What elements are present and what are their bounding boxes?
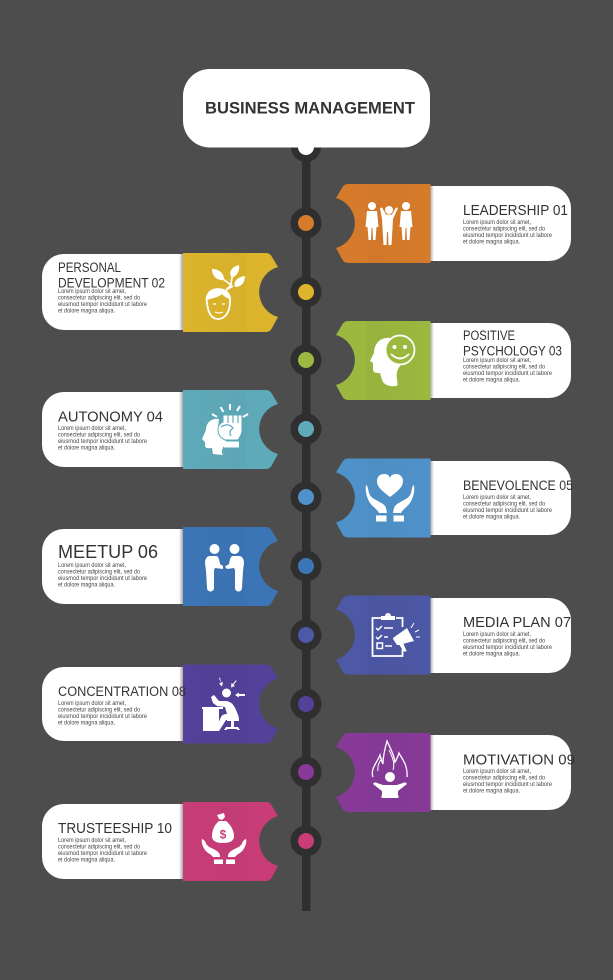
text block: Lorem ipsum dolor sit amet, (463, 768, 531, 775)
text block (58, 837, 147, 864)
text block: eiusmod tempor incididunt ut labore (463, 507, 552, 514)
text block: et dolore magna aliqua. (58, 582, 115, 588)
text block: Lorem ipsum dolor sit amet, (58, 288, 126, 295)
heading: LEADERSHIP 01 (463, 203, 568, 219)
text block: consectetur adipiscing elit, sed do (58, 294, 140, 302)
heading: AUTONOMY 04 (58, 410, 163, 426)
text block: consectetur adipiscing elit, sed do (463, 774, 545, 782)
text block: eiusmod tempor incididunt ut labore (58, 301, 147, 308)
panel: positive psychology 03 (336, 321, 571, 400)
panel: autonomy 04 (42, 390, 278, 469)
heading: PSYCHOLOGY 03 (463, 344, 562, 358)
timeline node 09 (290, 756, 322, 788)
text block (463, 219, 552, 246)
icon: money bag in hands (202, 813, 246, 864)
text block: et dolore magna aliqua. (463, 650, 520, 658)
text block (58, 562, 147, 588)
text block: consectetur adipiscing elit, sed do (463, 364, 545, 370)
text block: eiusmod tempor incididunt ut labore (463, 781, 552, 788)
timeline node 01 (290, 208, 322, 238)
icon: two people shaking hands (205, 544, 244, 592)
text block: et dolore magna aliqua. (58, 720, 115, 726)
timeline node 03 (290, 344, 322, 376)
text block: Lorem ipsum dolor sit amet, (463, 631, 531, 638)
text block (58, 425, 147, 452)
panel: benevolence 05 (336, 458, 573, 538)
header box (183, 69, 430, 155)
heading (463, 328, 562, 358)
text block (463, 494, 552, 520)
heading: BENEVOLENCE 05 (463, 478, 573, 493)
timeline node 08 (290, 688, 322, 720)
icon: head with smiley (370, 336, 414, 386)
timeline node 02 (290, 276, 322, 308)
panel: concentration 08 (42, 664, 278, 744)
text block: eiusmod tempor incididunt ut labore (463, 644, 552, 651)
heading: MOTIVATION 09 (463, 752, 575, 768)
heading: MEDIA PLAN 07 (463, 615, 571, 631)
text block: consectetur adipiscing elit, sed do (463, 638, 545, 644)
text block: et dolore magna aliqua. (463, 788, 520, 794)
text block: Lorem ipsum dolor sit amet, (463, 494, 531, 501)
panel: leadership 01 (336, 184, 571, 263)
text block: et dolore magna aliqua. (463, 376, 520, 384)
heading: MEETUP 06 (58, 542, 158, 562)
text block (463, 768, 552, 794)
text block: et dolore magna aliqua. (463, 514, 520, 520)
text block: eiusmod tempor incididunt ut labore (58, 713, 147, 720)
text block: Lorem ipsum dolor sit amet, (463, 357, 531, 364)
icon: stressed person at desk (202, 678, 245, 731)
text block: consectetur adipiscing elit, sed do (58, 844, 140, 850)
text block: eiusmod tempor incididunt ut labore (58, 850, 147, 857)
panel: meetup 06 (42, 527, 278, 606)
header box: BUSINESS MANAGEMENT (205, 98, 416, 118)
timeline node 07 (290, 620, 322, 650)
timeline top joint (291, 132, 321, 162)
text block: consectetur adipiscing elit, sed do (463, 500, 545, 508)
heading (58, 260, 165, 290)
text block: Lorem ipsum dolor sit amet, (58, 425, 126, 432)
timeline line (302, 148, 310, 911)
text block: et dolore magna aliqua. (58, 856, 115, 864)
panel: motivation 09 (336, 733, 575, 812)
icon: heart in open hands (366, 474, 414, 522)
text block: eiusmod tempor incididunt ut labore (58, 438, 147, 445)
text block: eiusmod tempor incididunt ut labore (463, 370, 552, 377)
text block: consectetur adipiscing elit, sed do (58, 568, 140, 576)
panel: media plan 07 (336, 596, 571, 674)
heading: TRUSTEESHIP 10 (58, 821, 172, 837)
icon: money bag in hands: $ (220, 828, 227, 842)
text block: et dolore magna aliqua. (58, 444, 115, 452)
text block: Lorem ipsum dolor sit amet, (463, 219, 531, 226)
timeline node 05 (290, 482, 322, 512)
heading: CONCENTRATION 08 (58, 684, 186, 699)
text block: et dolore magna aliqua. (58, 308, 115, 314)
timeline node 10 (290, 826, 322, 856)
text block: eiusmod tempor incididunt ut labore (58, 575, 147, 582)
text block: Lorem ipsum dolor sit amet, (58, 837, 126, 844)
text block: eiusmod tempor incididunt ut labore (463, 232, 552, 239)
timeline node 06 (290, 550, 322, 582)
icon: person meditating with flames (372, 741, 407, 798)
text block: consectetur adipiscing elit, sed do (58, 432, 140, 438)
panel: personal development 02 (42, 253, 278, 332)
heading: POSITIVE (463, 328, 515, 343)
text block (58, 700, 147, 726)
timeline node 04 (290, 414, 322, 444)
text block: Lorem ipsum dolor sit amet, (58, 562, 126, 569)
text block: et dolore magna aliqua. (463, 238, 520, 246)
text block: consectetur adipiscing elit, sed do (58, 706, 140, 714)
heading: PERSONAL (58, 260, 121, 275)
icon: head with growing plant (207, 265, 245, 319)
text block (463, 631, 552, 658)
panel: trusteeship 10 (42, 802, 278, 881)
heading: DEVELOPMENT 02 (58, 276, 165, 290)
icon: head with raised fist (202, 404, 248, 455)
text block (58, 288, 147, 314)
text block (463, 357, 552, 384)
icon: clipboard with megaphone (372, 613, 420, 656)
icon: three business people (366, 202, 412, 245)
text block: consectetur adipiscing elit, sed do (463, 226, 545, 232)
text block: Lorem ipsum dolor sit amet, (58, 700, 126, 707)
